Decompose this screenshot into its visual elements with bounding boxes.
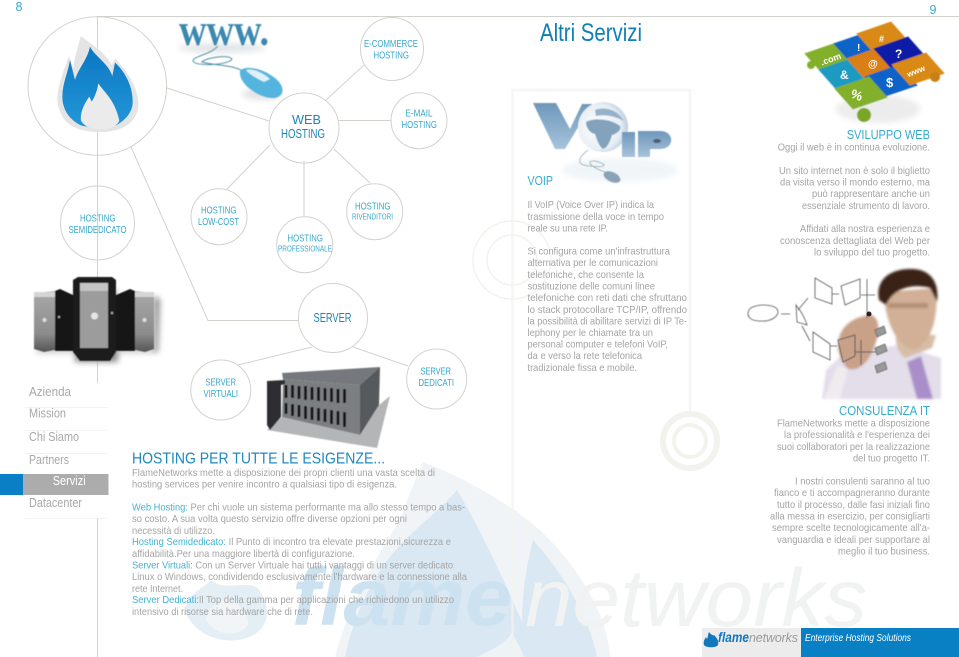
circle: e-mail hosting: E-MAIL [406,108,433,120]
circle: web hosting: WEB [292,112,321,127]
heading: hosting per tutte le esigenze: HOSTING PER TUTTE LE ESIGENZE... [132,450,385,468]
circle: hosting rivenditori: HOSTING [355,200,390,212]
background watermark: flame networks: flame [292,552,512,643]
text block: consulenza it: sempre scelte tecnologicamente all'a- [772,523,930,534]
background watermark: flame networks: networks [525,553,867,644]
puzzle symbols: ! [857,43,860,54]
text block: voip: reale su una rete IP. [528,224,608,234]
circle: hosting semidedicato: SEMIDEDICATO [68,224,126,236]
circle: hosting professionale: HOSTING [288,232,323,244]
text block: hosting services: rete Internet. [132,584,183,595]
text block: voip: telefoniche, che consente la [528,270,644,281]
text block: consulenza it: vanguardia e ideali per supportare al [777,535,930,546]
text block: sviluppo web [778,127,931,258]
circle: server virtuali: SERVER [206,376,236,388]
text block: sviluppo web: Affidati alla nostra esperienza e [800,224,930,235]
text block: voip: trasmissione della voce in tempo [528,212,664,223]
text block: consulenza it: alla messa in esercizio, per consigliarti [770,512,930,522]
text block: voip [528,174,687,374]
puzzle symbols [819,34,927,104]
text block: voip: telefoniche con reti dati che sfruttano [528,293,687,304]
text block: voip: VOIP [528,174,553,188]
text block: sviluppo web: conoscenza dettagliata del Web per [780,236,931,247]
text block: sviluppo web: Un sito internet non è solo il biglietto [779,166,930,177]
text block: voip: alternativa per le comunicazioni [528,258,658,269]
puzzle symbols: # [879,34,884,44]
text block: voip: lo stack protocollare TCP/IP, offrendo [528,305,687,316]
circle: web hosting [269,93,339,163]
text block: voip: Il VoIP (Voice Over IP) indica la [528,200,654,211]
text block: hosting services: Hosting Semidedicato: Il Punto di incontro tra elevate prestazioni,sicurezza e [132,537,451,548]
sidebar menu: Chi Siamo [29,429,79,444]
circle: server dedicati [407,349,467,409]
image: blade server [267,367,390,448]
circle: server virtuali [191,360,251,420]
image: puzzle [804,22,945,123]
background watermark: flame networks [185,462,867,657]
text block: voip: la possibilità di abilitare servizi di IP Te- [528,316,687,328]
text block: hosting services: Linux o Windows, condividendo esclusivamente l'hardware e la connessione alla [132,572,467,583]
puzzle symbols: .com [819,51,842,67]
circle: e-commerce hosting: HOSTING [374,50,409,62]
text block: consulenza it: la professionalità e l'esperienza dei [784,430,930,441]
puzzle symbols: & [840,68,849,82]
text block: hosting services: necessità di utilizzo. [132,526,215,537]
image: consultant with network sketch [748,269,941,399]
circle: web hosting: HOSTING [281,126,325,141]
circle: e-mail hosting: HOSTING [402,119,437,131]
text block: voip: Si configura come un'infrastruttura [528,246,670,258]
page number right: 9 [930,3,936,17]
circle: e-commerce hosting: E-COMMERCE [364,38,418,50]
circle: hosting low-cost: HOSTING [201,204,236,216]
circle: hosting semidedicato [60,186,134,260]
text block: sviluppo web: da visita verso il mondo esterno, ma [780,178,930,188]
circle: hosting low-cost: LOW-COST [198,216,239,228]
text block: hosting services: Server Virtuali: Con un Server Virtuale hai tutti i vantaggi di un server dedicato [132,560,453,572]
text block: consulenza it: meglio il tuo business. [838,546,930,558]
circle: server [298,284,368,352]
text block: consulenza it: tutto il processo, dalle fasi iniziali fino [777,500,930,511]
text block: voip: tradizionale fissa e mobile. [528,363,637,374]
text block: sviluppo web: può rappresentare anche un [812,189,930,200]
image: voip [533,102,678,185]
text block: hosting services: Server Dedicati:Il Top della gamma per applicazioni che richiedono un utilizzo [132,595,454,606]
sidebar menu: Mission [29,406,66,420]
text block: hosting services [132,468,467,618]
circle: e-mail hosting [391,93,447,149]
puzzle symbols: $ [886,75,894,90]
footer bar: Enterprise Hosting Solutions [805,633,911,644]
circle: e-commerce hosting [360,18,424,80]
page number left: 8 [16,0,22,14]
footer bar: flame [718,630,749,645]
text block: sviluppo web: SVILUPPO WEB [847,127,930,142]
circle: hosting professionale [277,217,333,273]
icon: footer flame logo [704,632,718,647]
footer bar [702,628,959,657]
text block: hosting services: Web Hosting: Per chi vuole un sistema performante ma allo stesso tempo a bas- [132,502,465,514]
text block: voip: sostituzione delle comuni linee [528,282,655,292]
circle: server dedicati: SERVER [420,366,451,378]
decorative VoIP frame with rings [473,90,717,657]
image: server towers [34,277,160,362]
text block: hosting services: affidabilità.Per una maggiore libertà di configurazione. [132,549,355,560]
puzzle symbols: www [905,63,927,79]
text block: consulenza it: suoi collaboratori per la realizzazione [777,442,930,453]
text block: voip: lephony per le chiamate tra un [528,328,653,339]
puzzle symbols: ? [895,47,902,61]
circle: server virtuali: VIRTUALI [204,388,238,400]
sidebar menu: Azienda [29,384,72,399]
text block: consulenza it: del tuo progetto IT. [853,454,930,464]
sidebar menu [0,384,108,518]
circle: server: SERVER [314,310,352,325]
circle: logo with flame [28,17,167,155]
text block: consulenza it [770,403,930,558]
image: www with mouse [178,4,282,100]
text block: sviluppo web: Oggi il web è in continua evoluzione. [778,142,930,154]
text block: hosting services: FlameNetworks mette a disposizione dei propri clienti una vasta scelta di [132,468,435,479]
text block: sviluppo web: essenziale strumento di lavoro. [802,201,930,212]
text block: consulenza it: CONSULENZA IT [839,403,930,418]
circle: hosting semidedicato: HOSTING [80,212,116,224]
text block: consulenza it: FlameNetworks mette a disposizione [777,418,930,430]
text block: hosting services: so costo. A sua volta questo servizio offre diverse opzioni per ogni [132,514,407,525]
text block: consulenza it: I nostri consulenti saranno al tuo [795,476,930,488]
text block: voip: da e verso la rete telefonica [528,351,642,362]
circle: hosting rivenditori [347,184,403,240]
text block: hosting services: hosting services per venire incontro a qualsiasi tipo di esigenza. [132,480,397,490]
icon: flame [57,36,138,132]
image: www with mouse: www. [179,4,269,55]
sidebar menu: Partners [29,452,69,467]
circle: server dedicati: DEDICATI [418,377,454,389]
heading: altri servizi: Altri Servizi [540,19,642,47]
sidebar menu: Datacenter [29,495,83,510]
puzzle symbols: % [849,86,865,104]
circle: hosting rivenditori: RIVENDITORI [352,212,393,222]
circle: hosting professionale: PROFESSIONALE [278,244,332,254]
text block: consulenza it: fianco e ti accompagneranno durante [774,488,930,499]
text block: sviluppo web: lo sviluppo del tuo progetto. [814,248,930,258]
sidebar menu: Servizi [53,473,86,488]
footer bar: networks [749,631,798,645]
text block: voip: personal computer e telefoni VoIP, [528,340,668,350]
circle: hosting low-cost [191,189,247,245]
text block: hosting services: intensivo di risorse sia hardware che di rete. [132,607,313,618]
puzzle symbols: @ [868,59,878,70]
